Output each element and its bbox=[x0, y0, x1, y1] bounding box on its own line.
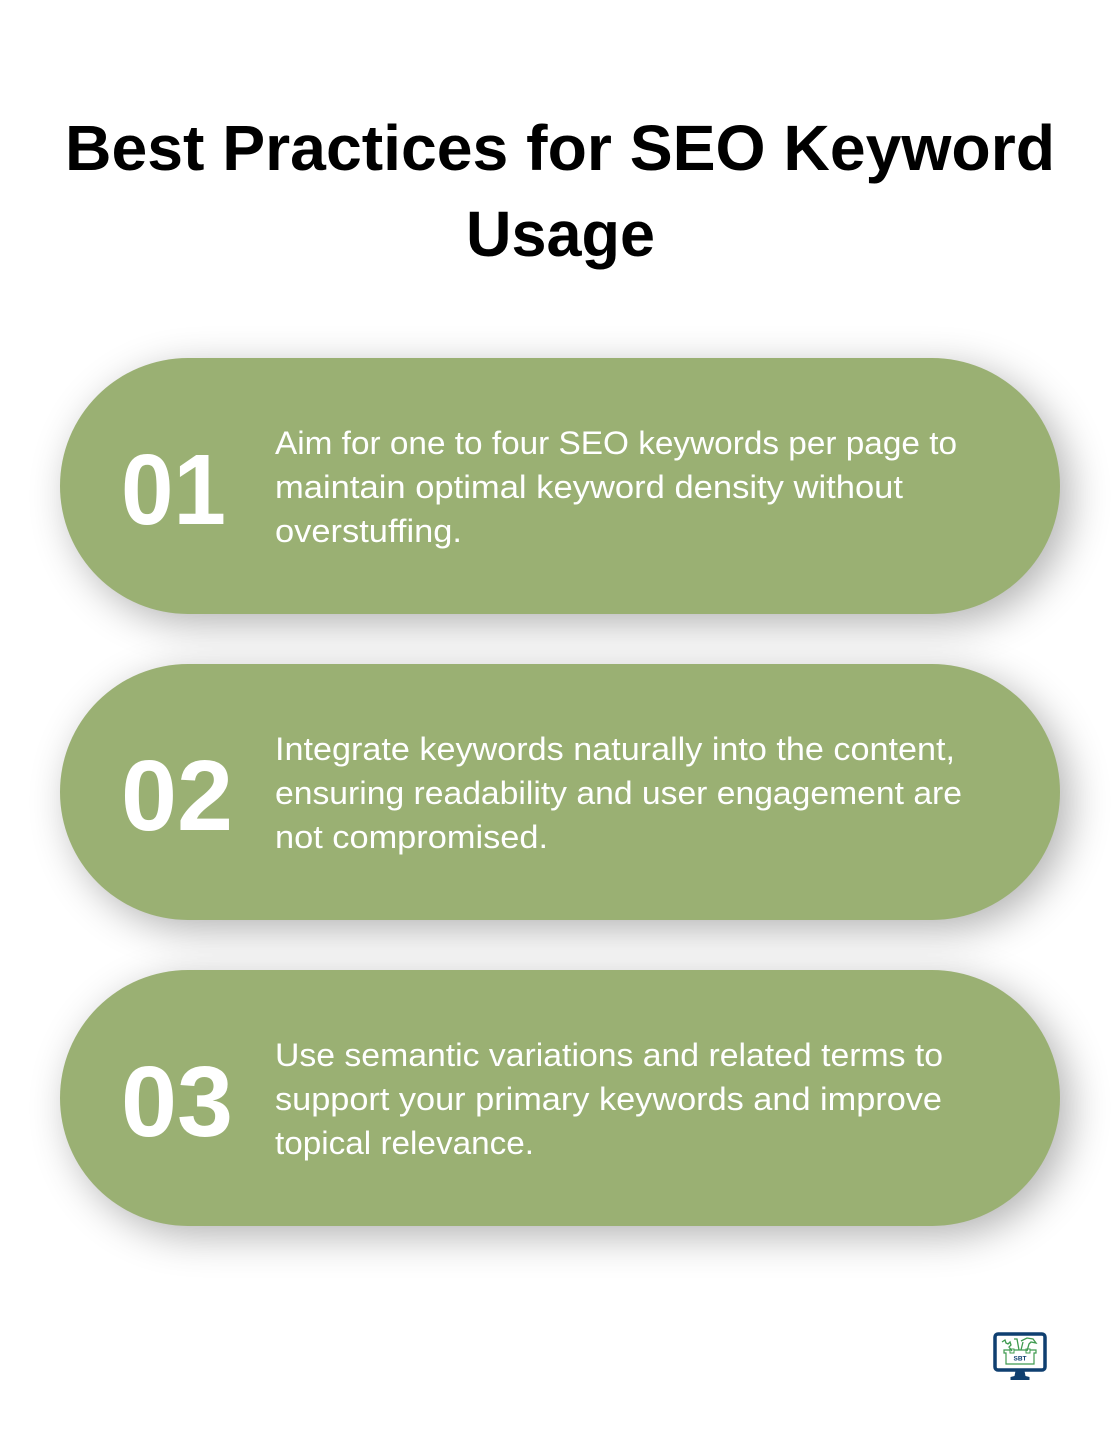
text block: card 3: topical relevance. bbox=[275, 1125, 534, 1161]
text block: card 2: Integrate keywords naturally into the content, bbox=[275, 731, 955, 767]
number 03: 03 bbox=[121, 1046, 233, 1158]
text block: card 1: maintain optimal keyword density without bbox=[275, 469, 903, 505]
icon: monitor with toolbox logo: SBT bbox=[1014, 1356, 1027, 1362]
panel: card 2 background bbox=[60, 664, 1060, 920]
text block: card 1 bbox=[275, 425, 957, 549]
text block: card 2: not compromised. bbox=[275, 819, 548, 855]
text block: card 2 bbox=[275, 731, 962, 855]
text block: card 2: ensuring readability and user engagement are bbox=[275, 775, 962, 811]
text block: card 1: Aim for one to four SEO keywords per page to bbox=[275, 425, 957, 461]
text block: card 3: Use semantic variations and related terms to bbox=[275, 1037, 943, 1073]
icon: monitor with toolbox logo bbox=[995, 1334, 1045, 1380]
text block: card 3 bbox=[275, 1037, 943, 1161]
text block: card 3: support your primary keywords and improve bbox=[275, 1081, 942, 1117]
title: Best Practices for SEO Keyword bbox=[65, 112, 1055, 184]
panel: card 1 background bbox=[60, 358, 1060, 614]
panel: card 3 background bbox=[60, 970, 1060, 1226]
number 02: 02 bbox=[121, 740, 233, 852]
title bbox=[65, 112, 1055, 270]
text block: card 1: overstuffing. bbox=[275, 513, 462, 549]
number 01: 01 bbox=[121, 434, 226, 546]
title: Usage bbox=[466, 198, 655, 270]
